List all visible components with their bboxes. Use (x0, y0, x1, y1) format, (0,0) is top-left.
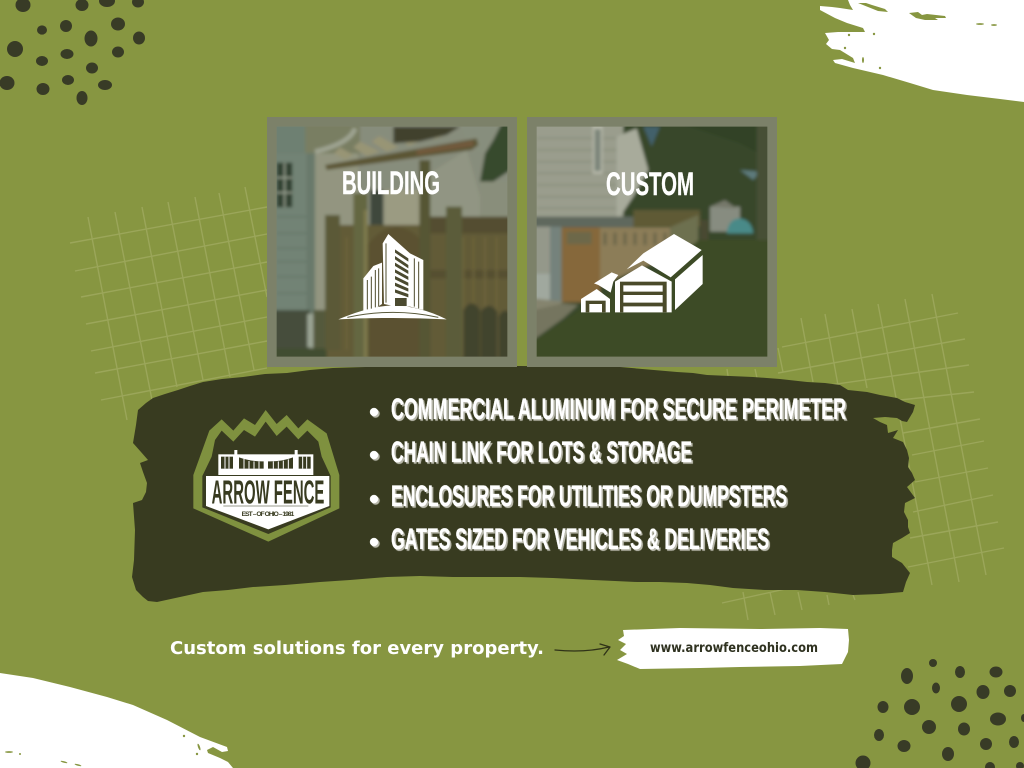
icon: garages (581, 234, 703, 312)
logo subtitle: EST – OF OHIO – 1981 (242, 511, 295, 518)
icon: office building (338, 234, 447, 319)
photo: gate and pergola (273, 123, 511, 360)
dark brush panel (132, 366, 915, 602)
dots: top left (0, 0, 145, 105)
url brush (617, 628, 849, 669)
grid pattern: left (70, 187, 267, 420)
photo card: building (267, 117, 517, 367)
bullet dots (370, 408, 378, 546)
grid pattern: right (722, 294, 1004, 620)
logo badge: ARROW FENCE (212, 474, 324, 511)
heading: building: BUILDING (342, 165, 440, 201)
logo badge (193, 410, 339, 542)
name plate (206, 476, 329, 529)
url text: www.arrowfenceohio.com (650, 640, 818, 656)
tagline: Custom solutions for every property. (170, 638, 544, 659)
item 4: GATES SIZED FOR VEHICLES & DELIVERIES (391, 523, 769, 556)
logo rule (223, 505, 308, 507)
frame: building (267, 117, 517, 367)
item 2: CHAIN LINK FOR LOTS & STORAGE (391, 436, 692, 469)
frame: custom (527, 117, 777, 367)
url badge (617, 628, 849, 669)
badge inner shape (202, 422, 331, 534)
bullet list (370, 393, 846, 556)
brush stroke: bottom left (0, 673, 233, 768)
brush stroke: top right (820, 0, 1024, 102)
fence gate (218, 450, 313, 475)
heading: custom: CUSTOM (606, 166, 694, 202)
photo: fence and lawn (533, 123, 771, 360)
arrow (555, 644, 610, 655)
dots: bottom right (856, 659, 1024, 768)
badge outer shape (193, 410, 339, 542)
photo card: custom (527, 117, 777, 367)
